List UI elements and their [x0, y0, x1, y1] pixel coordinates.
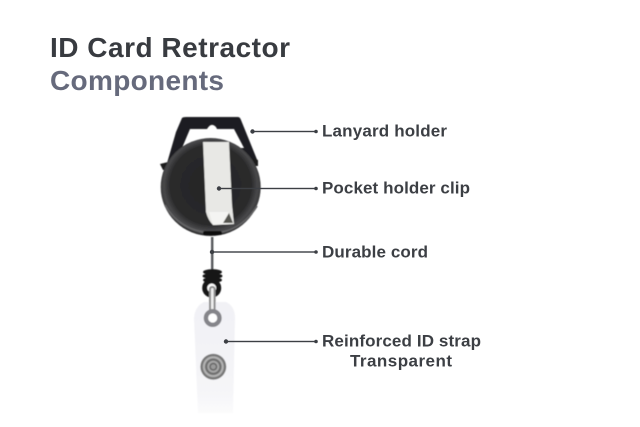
callout: durable cord: Durable cord	[322, 242, 428, 262]
callout: reinforced ID strap	[224, 332, 481, 371]
durable cord	[211, 237, 213, 273]
retractor product	[160, 117, 261, 236]
strap grommet	[206, 311, 220, 325]
callout: pocket holder clip: Pocket holder clip	[322, 179, 470, 198]
side tabs	[160, 158, 258, 170]
callout: reinforced ID strap: Reinforced ID strap	[322, 332, 481, 351]
pocket holder clip	[203, 142, 234, 225]
snap rivet	[200, 354, 226, 380]
title line 1: ID Card Retractor	[50, 32, 290, 63]
callout: lanyard holder	[250, 122, 447, 141]
cord exit	[203, 231, 222, 235]
callout: lanyard holder: Lanyard holder	[322, 122, 447, 141]
transparent ID strap	[194, 302, 235, 413]
reel ring highlight	[165, 205, 257, 233]
lanyard holder loop	[165, 117, 258, 170]
title	[50, 32, 290, 96]
title line 2: Components	[50, 65, 224, 96]
reel body	[161, 138, 261, 236]
callout: pocket holder clip	[217, 179, 470, 198]
black ring	[205, 281, 219, 295]
callout: durable cord	[210, 242, 428, 262]
lower assembly	[194, 237, 235, 413]
black beads	[202, 269, 222, 283]
metal link	[210, 287, 215, 315]
callout: reinforced ID strap: Transparent	[350, 352, 452, 371]
